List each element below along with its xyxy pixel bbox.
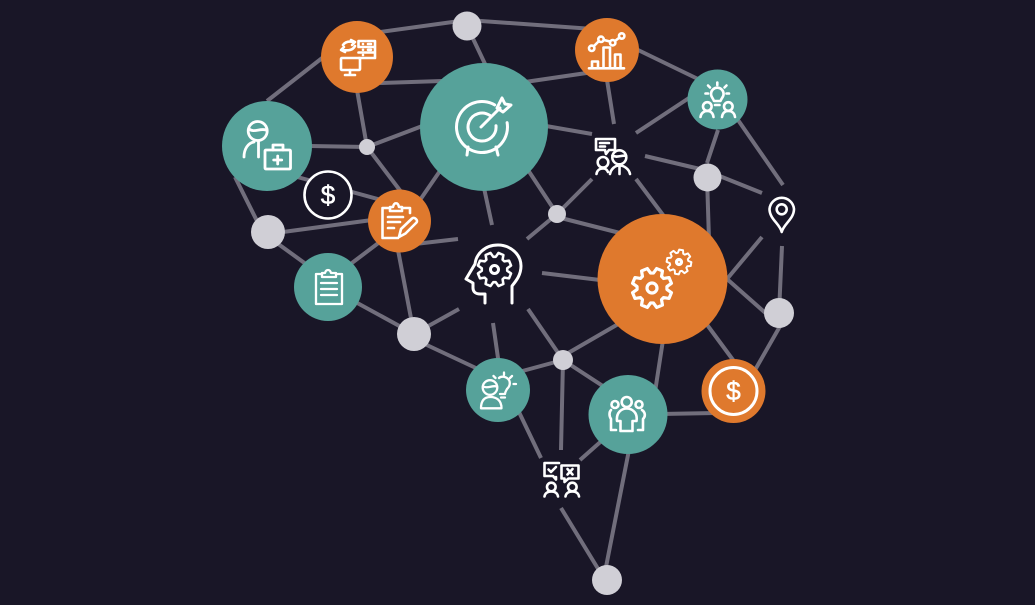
icon: clipboard with pencil — [382, 203, 417, 238]
node: head with gear — [466, 245, 521, 303]
icon: two gears — [626, 248, 693, 314]
node: dollar coin — [702, 359, 766, 423]
node: grey connector left — [251, 215, 285, 249]
node: checklist — [294, 253, 362, 321]
icon: medical worker with first-aid case — [244, 122, 290, 169]
node: grey connector centre — [548, 205, 566, 223]
icon: computer and server — [341, 40, 375, 75]
node: person with idea — [466, 358, 530, 422]
node: grey connector top — [452, 12, 482, 40]
icon: two people with check and cross bubbles — [544, 463, 579, 496]
node: team ideas — [688, 70, 748, 130]
node: grey connector right — [764, 298, 794, 328]
icon: clipboard list — [316, 270, 342, 304]
icon: dollar in ring: $ — [726, 376, 741, 406]
node: approve or reject — [544, 463, 579, 496]
icon: two people with speech bubble — [596, 139, 630, 174]
icon: map pin — [770, 198, 794, 232]
node: clipboard with pencil — [368, 190, 431, 252]
icon: dollar coin outline — [304, 172, 352, 218]
node: presenter (no fill) — [596, 139, 630, 174]
node: data systems — [321, 21, 393, 93]
icon: head with gear — [466, 245, 521, 303]
icon: group of three people — [610, 397, 645, 431]
icon: bar and line chart — [589, 33, 624, 68]
icon: lightbulb with two people — [700, 82, 735, 117]
node: grey connector lower left — [397, 317, 431, 351]
node: grey connector lower centre — [553, 350, 573, 370]
node: people group — [588, 375, 668, 454]
node: target — [420, 63, 548, 191]
node: analytics chart — [575, 18, 639, 82]
node: gears — [598, 214, 728, 344]
icon: target with arrow — [456, 98, 511, 155]
node: grey connector bottom — [592, 565, 622, 595]
icon: person with lightbulb — [481, 372, 516, 408]
node: medical worker — [222, 101, 312, 191]
node: grey connector small left — [359, 139, 375, 155]
node: grey connector upper right — [694, 164, 722, 192]
node: location pin — [770, 198, 794, 232]
icon: dollar coin outline: $ — [321, 180, 336, 210]
